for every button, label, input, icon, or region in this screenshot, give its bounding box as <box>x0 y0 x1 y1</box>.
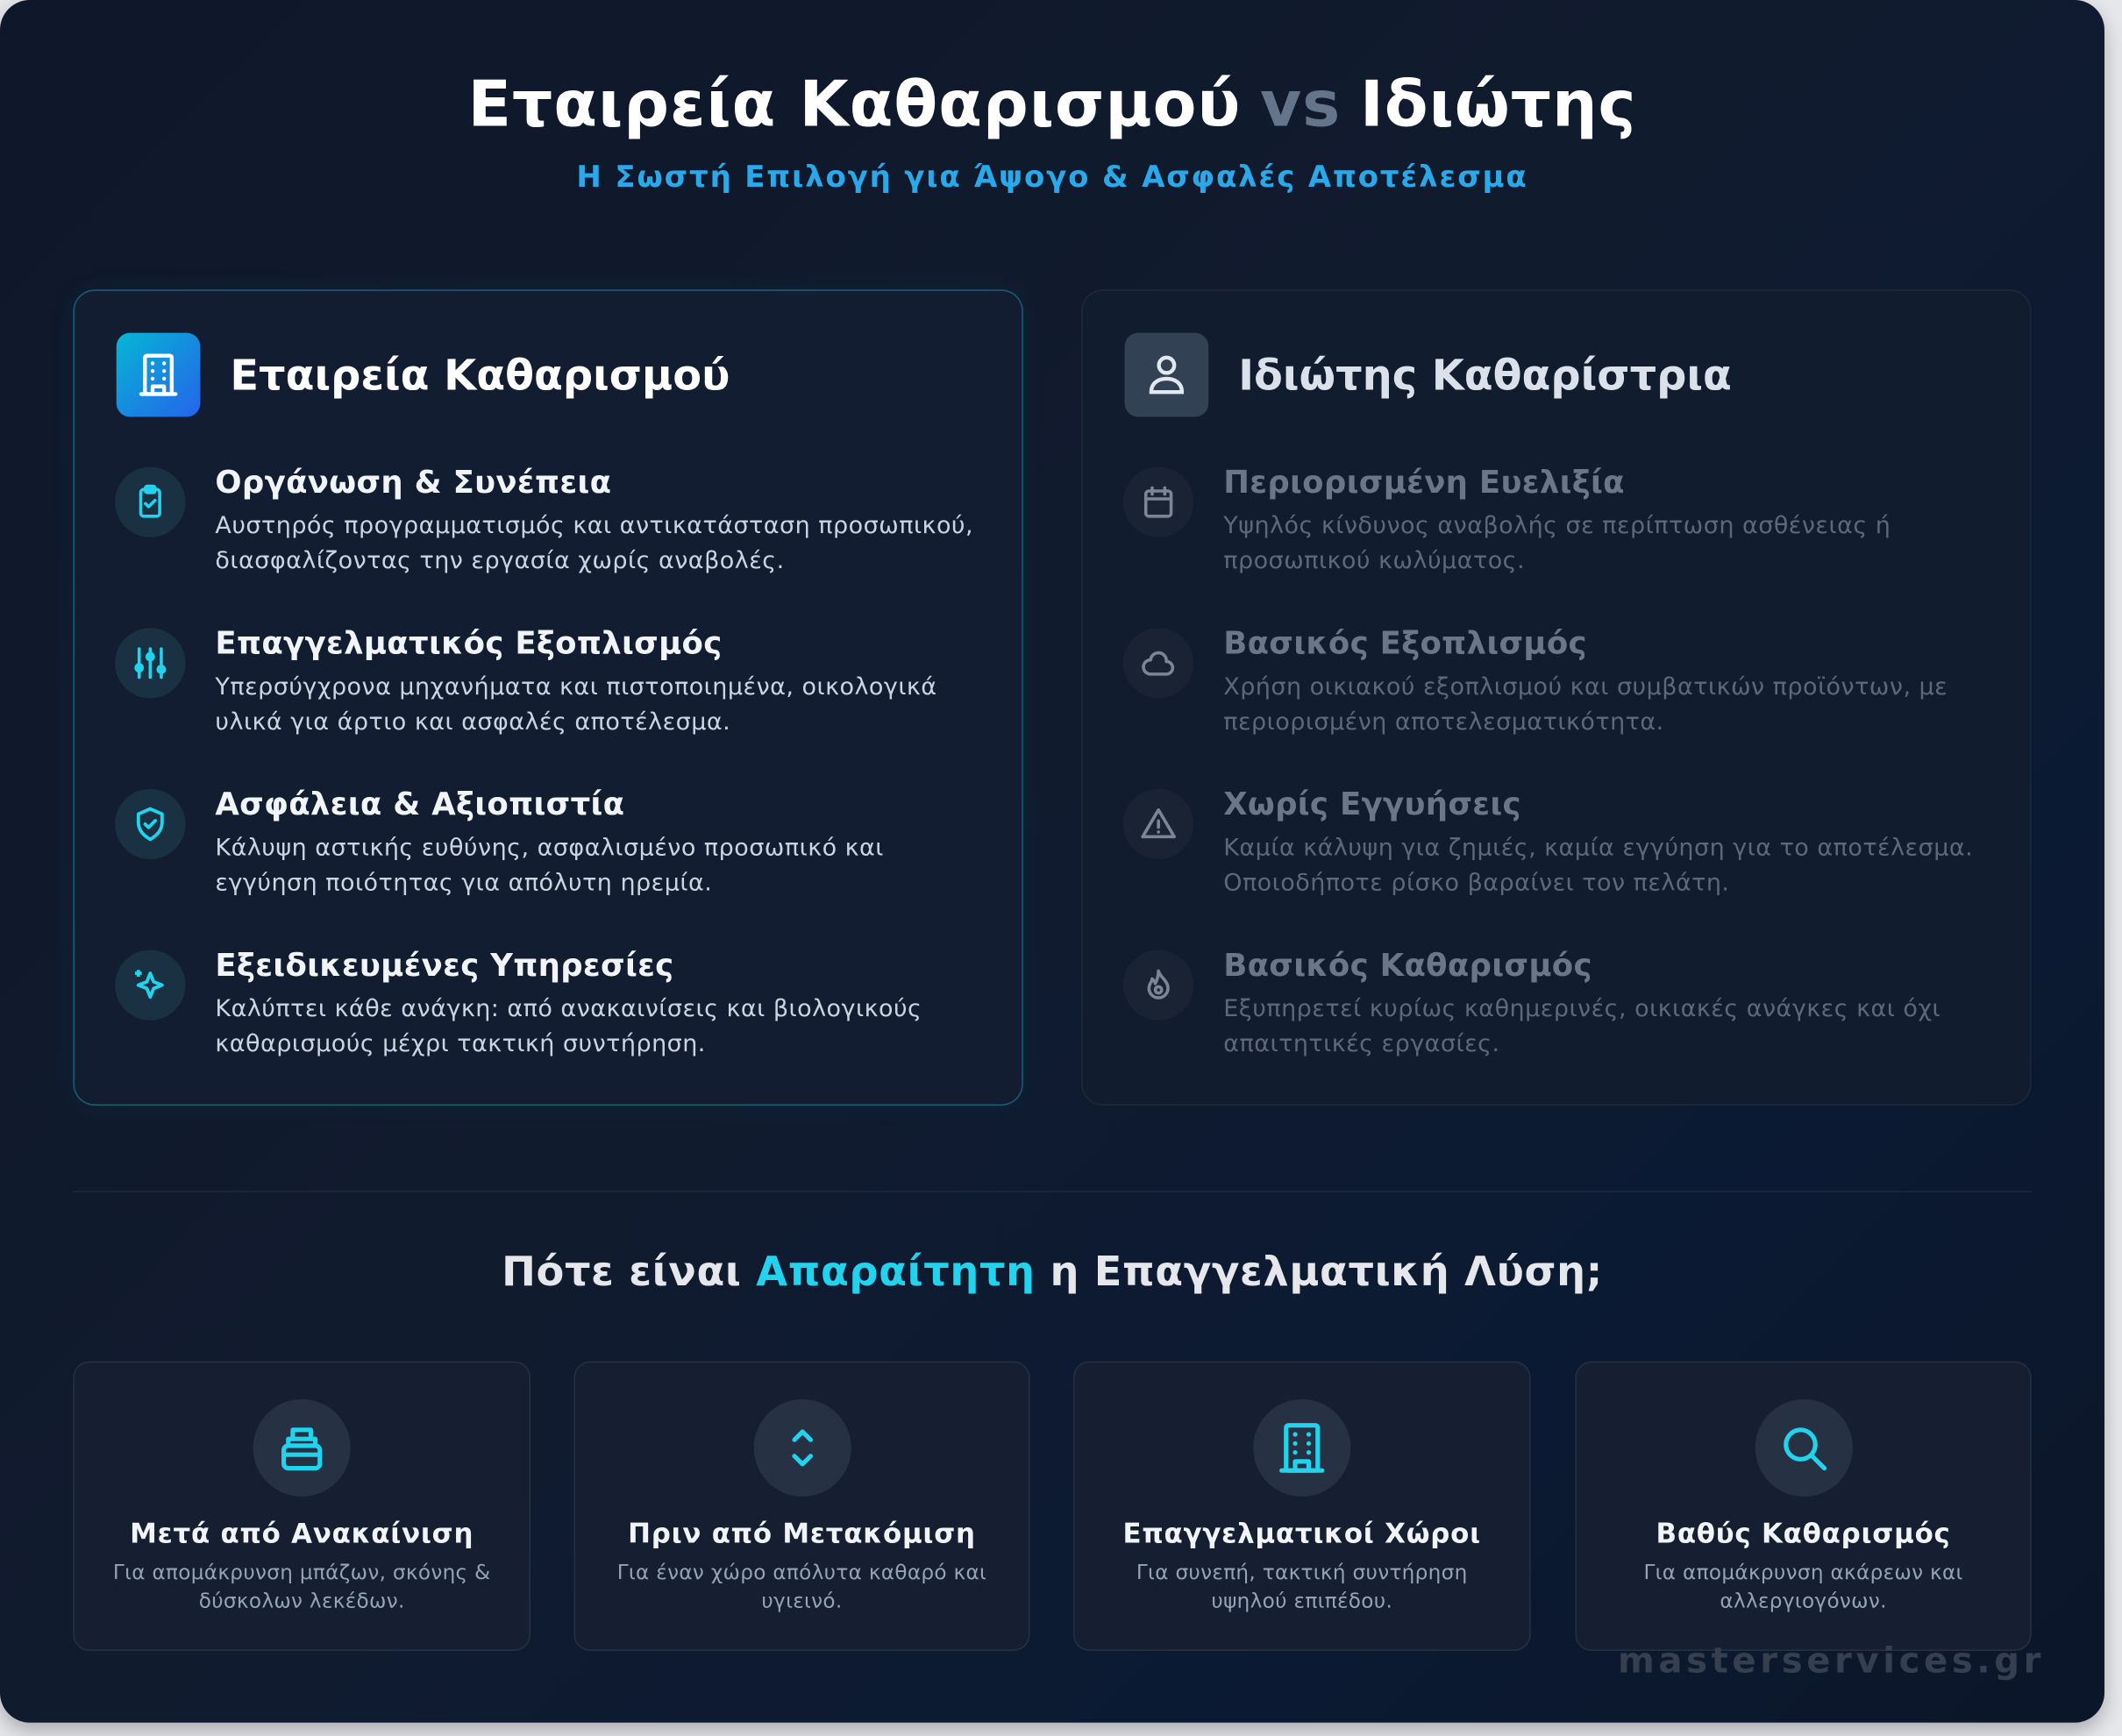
card: deep cleaning: αλλεργιογόνων. <box>1720 1589 1887 1613</box>
panel: private cleaner <box>1081 289 2032 1106</box>
card: business premises: Επαγγελματικοί Χώροι <box>1123 1517 1481 1549</box>
item: no guarantees: Χωρίς Εγγυήσεις <box>1223 787 1521 822</box>
card: before moving <box>573 1362 1030 1651</box>
card: after renovation: Μετά από Ανακαίνιση <box>130 1517 474 1549</box>
item: equipment: υλικά για άρτιο και ασφαλές αποτέλεσμα. <box>215 709 730 736</box>
card: business premises: Για συνεπή, τακτική συντήρηση <box>1136 1561 1468 1584</box>
item: specialised: Καλύπτει κάθε ανάγκη: από ανακαινίσεις και βιολογικούς <box>215 996 922 1023</box>
icon: bucket <box>253 1399 351 1497</box>
item: flexibility <box>1143 466 1891 575</box>
card: after renovation: Για απομάκρυνση μπάζων, σκόνης & <box>113 1561 490 1584</box>
item: basic equipment: περιορισμένη αποτελεσματικότητα. <box>1223 709 1664 736</box>
card: before moving: Πριν από Μετακόμιση <box>628 1517 976 1549</box>
item: flexibility: Περιορισμένη Ευελιξία <box>1223 466 1625 501</box>
card: before moving: Για έναν χώρο απόλυτα καθαρό και <box>617 1561 986 1584</box>
item: specialised: καθαρισμούς μέχρι τακτική συντήρηση. <box>215 1031 706 1058</box>
card: deep cleaning: Για απομάκρυνση ακάρεων και <box>1643 1561 1963 1584</box>
card: deep cleaning: Βαθύς Καθαρισμός <box>1656 1517 1951 1549</box>
item: organisation: Οργάνωση & Συνέπεια <box>215 466 611 501</box>
card: before moving: υγιεινό. <box>761 1589 843 1613</box>
item: no guarantees: Οποιοδήποτε ρίσκο βαραίνει τον πελάτη. <box>1223 870 1729 897</box>
item: no guarantees: Καμία κάλυψη για ζημιές, καμία εγγύηση για το αποτέλεσμα. <box>1223 835 1973 862</box>
panel heading: Ιδιώτης Καθαρίστρια <box>1238 352 1732 401</box>
item: basic cleaning: απαιτητικές εργασίες. <box>1223 1031 1500 1058</box>
item: flexibility: Υψηλός κίνδυνος αναβολής σε περίπτωση ασθένειας ή <box>1223 513 1891 540</box>
icon: building header <box>117 333 200 416</box>
item: basic cleaning: Εξυπηρετεί κυρίως καθημερινές, οικιακές ανάγκες και όχι <box>1223 996 1940 1023</box>
icon: person header <box>1125 333 1208 416</box>
item: basic cleaning <box>1147 949 1940 1058</box>
card: after renovation <box>73 1362 530 1651</box>
item: no guarantees <box>1141 787 1973 897</box>
item: safety: εγγύηση ποιότητας για απόλυτη ηρεμία. <box>215 870 712 897</box>
item: equipment: Επαγγελματικός Εξοπλισμός <box>215 627 723 662</box>
card: after renovation: δύσκολων λεκέδων. <box>199 1589 405 1613</box>
item: basic cleaning: Βασικός Καθαρισμός <box>1223 949 1592 984</box>
card: business premises <box>1073 1362 1531 1651</box>
item: basic equipment: Χρήση οικιακού εξοπλισμού και συμβατικών προϊόντων, με <box>1223 674 1948 701</box>
item: organisation: Αυστηρός προγραμματισμός και αντικατάσταση προσωπικού, <box>215 513 973 540</box>
title: Εταιρεία Καθαρισμού vs Ιδιώτης <box>468 68 1636 142</box>
item: basic equipment <box>1142 627 1948 736</box>
item: safety: Κάλυψη αστικής ευθύνης, ασφαλισμένο προσωπικό και <box>215 835 884 862</box>
item: organisation: διασφαλίζοντας την εργασία χωρίς αναβολές. <box>215 548 785 575</box>
item: organisation <box>115 466 973 575</box>
icon: magnifier <box>1755 1399 1852 1497</box>
item: safety: Ασφάλεια & Αξιοπιστία <box>215 787 624 822</box>
item: flexibility: προσωπικού κωλύματος. <box>1223 548 1525 575</box>
panel heading: Εταιρεία Καθαρισμού <box>230 352 730 401</box>
card: deep cleaning <box>1576 1362 2032 1651</box>
icon: building <box>1253 1399 1350 1497</box>
item: safety <box>115 787 884 897</box>
item: equipment: Υπερσύγχρονα μηχανήματα και πιστοποιημένα, οικολογικά <box>215 674 937 701</box>
item: specialised: Εξειδικευμένες Υπηρεσίες <box>215 949 674 984</box>
section heading: Πότε είναι Απαραίτητη η Επαγγελματική Λύση; <box>502 1249 1603 1297</box>
item: equipment <box>115 627 937 736</box>
icon: chevrons <box>753 1399 851 1497</box>
card: business premises: υψηλού επιπέδου. <box>1211 1589 1392 1613</box>
panel: cleaning company <box>73 289 1023 1106</box>
watermark: masterservices.gr <box>1618 1641 2045 1682</box>
subtitle: Η Σωστή Επιλογή για Άψογο & Ασφαλές Αποτέλεσμα <box>576 161 1528 195</box>
item: basic equipment: Βασικός Εξοπλισμός <box>1223 627 1587 662</box>
item: specialised <box>115 949 922 1058</box>
